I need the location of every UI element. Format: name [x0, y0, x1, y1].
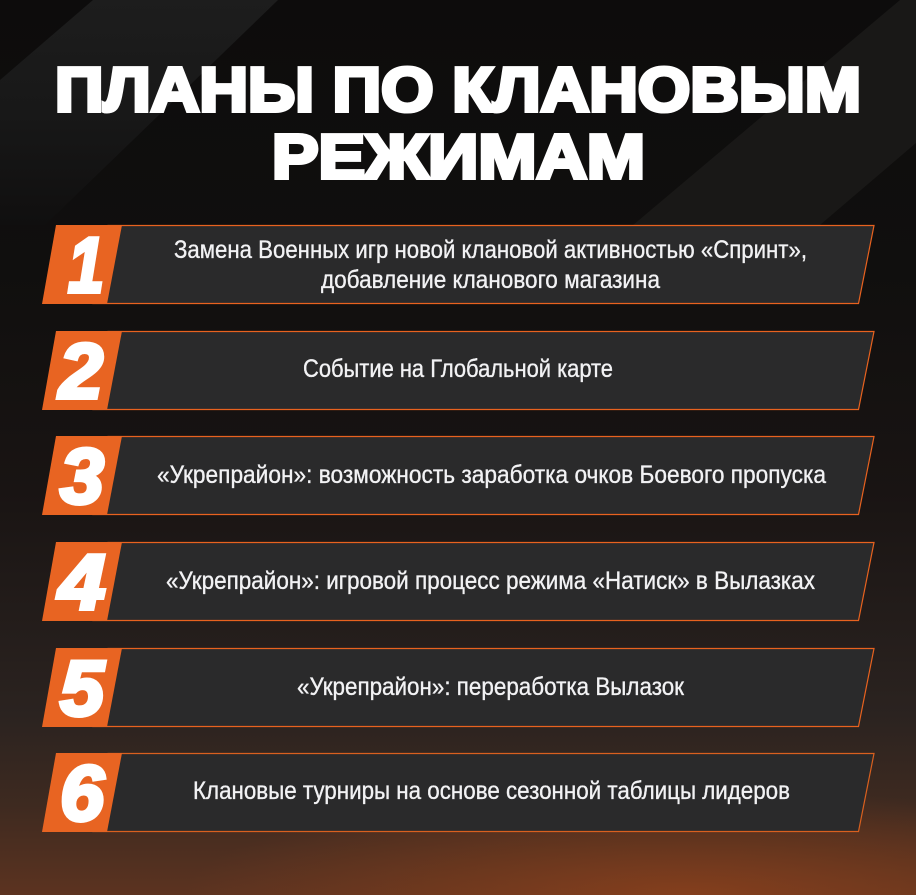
item 4: [42, 538, 874, 626]
item 1: 1: [68, 221, 104, 309]
item 2: [42, 327, 874, 415]
item 5: 5: [60, 644, 106, 732]
item 2: 2: [57, 327, 103, 415]
title: РЕЖИМАМ: [272, 123, 645, 192]
item 4: 4: [56, 538, 106, 626]
item 6: Клановые турниры на основе сезонной таблицы лидеров: [193, 777, 790, 805]
item 1: Замена Военных игр новой клановой активностью «Спринт»,: [174, 236, 807, 264]
item 5: [42, 644, 874, 732]
item 4: «Укрепрайон»: игровой процесс режима «Натиск» в Вылазках: [166, 567, 815, 595]
item 6: [42, 749, 874, 837]
item 1: добавление кланового магазина: [321, 266, 660, 294]
item 3: 3: [60, 432, 104, 520]
item 5: «Укрепрайон»: переработка Вылазок: [297, 673, 685, 701]
item 6: 6: [60, 749, 105, 837]
item 2: Событие на Глобальной карте: [303, 355, 613, 383]
item 1: [42, 221, 874, 309]
title: [55, 56, 861, 192]
item 3: [42, 432, 874, 520]
item 3: «Укрепрайон»: возможность заработка очков Боевого пропуска: [157, 461, 826, 489]
title: ПЛАНЫ ПО КЛАНОВЫМ: [55, 56, 861, 125]
